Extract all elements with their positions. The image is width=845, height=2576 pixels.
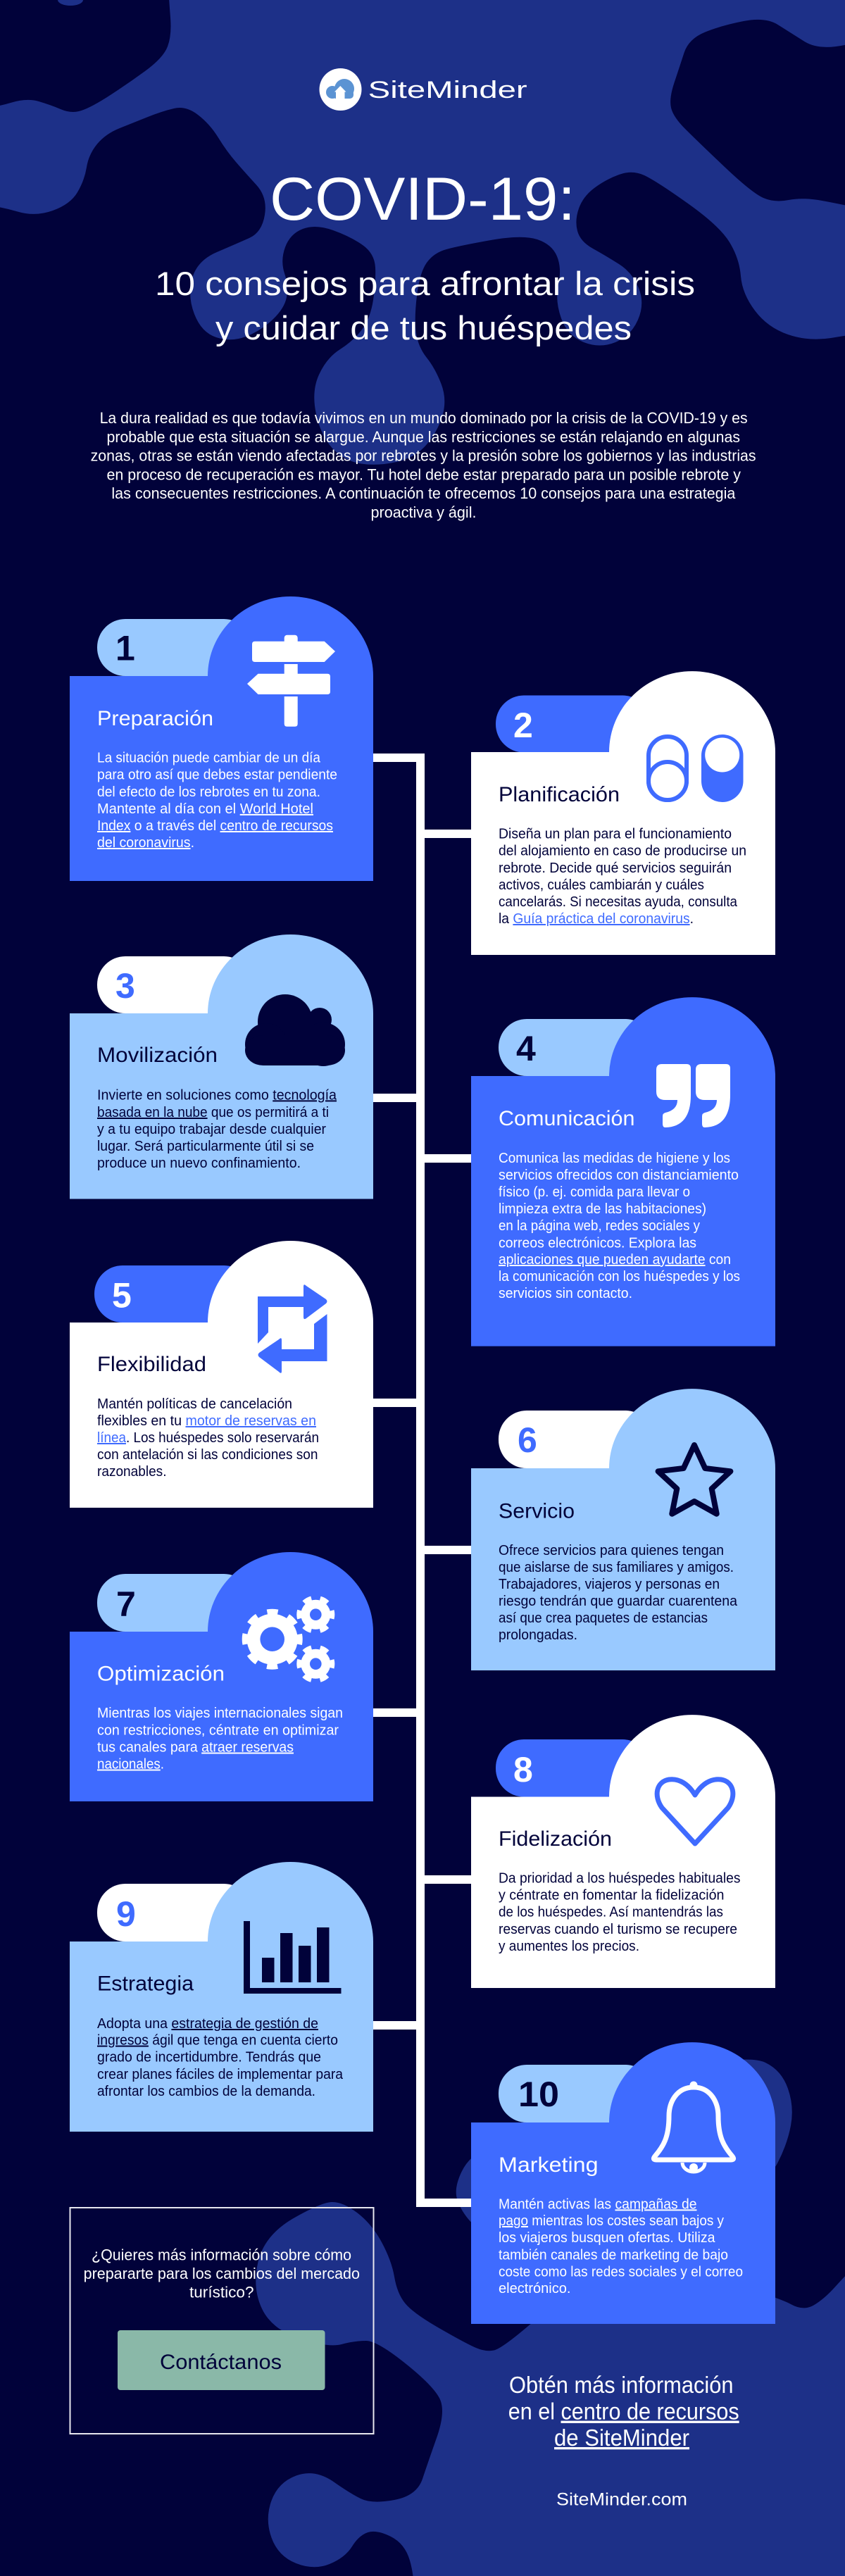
number 8: 8 <box>513 1750 533 1789</box>
body text: Index o a través del centro de recursos <box>97 818 333 834</box>
body text: también canales de marketing de bajo <box>499 2247 728 2263</box>
body text: produce un nuevo confinamiento. <box>97 1156 301 1171</box>
body text: Mantén políticas de cancelación <box>97 1396 292 1412</box>
connector timeline <box>373 754 471 2207</box>
body text: Invierte en soluciones como tecnología <box>97 1087 337 1103</box>
heading: Movilización <box>97 1044 218 1067</box>
intro text: La dura realidad es que todavía vivimos en un mundo dominado por la crisis de la COVID-19 y es <box>100 409 748 427</box>
number 6: 6 <box>518 1420 537 1460</box>
body text: coste como las redes sociales y el correo <box>499 2265 743 2280</box>
logo: SiteMinder <box>320 68 527 111</box>
body text: Mientras los viajes internacionales sigan <box>97 1706 343 1721</box>
subtitle: 10 consejos para afrontar la crisis <box>155 265 695 302</box>
body text: con antelación si las condiciones son <box>97 1447 318 1463</box>
body text: Mantén activas las campañas de <box>499 2196 697 2212</box>
body text <box>499 2196 743 2296</box>
heading: Fidelización <box>499 1827 612 1851</box>
footer text: resources: Obtén más información <box>509 2372 734 2398</box>
body text: prolongadas. <box>499 1627 577 1643</box>
body text: del coronavirus. <box>97 835 194 851</box>
call to action text: prepararte para los cambios del mercado <box>84 2265 360 2282</box>
heading: Servicio <box>499 1500 575 1523</box>
intro text: las consecuentes restricciones. A continuación te ofrecemos 10 consejos para una estrategia <box>111 484 736 502</box>
number 10: 10 <box>518 2075 559 2114</box>
body text: aplicaciones que pueden ayudarte con <box>499 1252 731 1268</box>
call to action text: turístico? <box>189 2284 254 2301</box>
number 9: 9 <box>116 1894 136 1934</box>
icon: gears <box>245 1598 332 1680</box>
body text: rebrote. Decide qué servicios seguirán <box>499 861 732 876</box>
number 3: 3 <box>115 966 135 1006</box>
icon: cloud <box>245 994 345 1066</box>
body text: grado de incertidumbre. Tendrás que <box>97 2049 321 2065</box>
panel: 1 Preparación <box>70 596 373 881</box>
number 5: 5 <box>112 1276 132 1315</box>
heading: Preparación <box>97 707 213 730</box>
body text: reservas cuando el turismo se recupere <box>499 1922 737 1937</box>
icon: signpost <box>247 635 335 727</box>
footer: website: SiteMinder.com <box>556 2490 687 2510</box>
intro text: zonas, otras se están viendo afectadas por rebrotes y la presión sobre los gobiernos y las industrias <box>91 447 756 465</box>
button: contact: Contáctanos <box>160 2351 282 2374</box>
icon: repeat arrows <box>258 1284 327 1373</box>
body text: Mantente al día con el World Hotel <box>97 801 313 817</box>
body text: activos, cuáles cambiarán y cuáles <box>499 877 704 893</box>
body text <box>499 1151 740 1301</box>
body text: riesgo tendrán que guardar cuarentena <box>499 1594 738 1609</box>
panel: 4 Comunicación <box>471 997 775 1346</box>
panel: 3 Movilización <box>70 934 373 1199</box>
heading: Flexibilidad <box>97 1353 206 1376</box>
body text <box>97 1396 319 1480</box>
body text: lugar. Será particularmente útil si se <box>97 1139 314 1154</box>
body text: línea. Los huéspedes solo reservarán <box>97 1430 319 1446</box>
body text <box>97 751 337 851</box>
panel: 5 Flexibilidad <box>70 1241 373 1508</box>
background blob: bottom <box>256 2060 845 2576</box>
logo: SiteMinder: SiteMinder <box>368 77 527 104</box>
body text: del alojamiento en caso de producirse un <box>499 844 746 859</box>
body text: que aislarse de sus familiares y amigos. <box>499 1560 734 1575</box>
icon: star <box>658 1445 730 1514</box>
body text: y céntrate en fomentar la fidelización <box>499 1887 724 1903</box>
panel: 6 Servicio <box>471 1389 775 1670</box>
body text: La situación puede cambiar de un día <box>97 751 321 766</box>
footer text: resources: de SiteMinder <box>554 2425 689 2451</box>
footer text: resources <box>508 2372 739 2451</box>
intro text: proactiva y ágil. <box>370 504 476 521</box>
body text <box>97 1087 337 1171</box>
body text: así que crea paquetes de estancias <box>499 1611 708 1626</box>
body text: flexibles en tu motor de reservas en <box>97 1413 316 1429</box>
icon: heart <box>657 1780 733 1844</box>
body text: Da prioridad a los huéspedes habituales <box>499 1870 741 1886</box>
heading: Marketing <box>499 2153 599 2177</box>
body text: pago mientras los costes sean bajos y <box>499 2213 724 2229</box>
body text: en la página web, redes sociales y <box>499 1218 700 1234</box>
icon: bar chart <box>244 1921 341 1994</box>
heading: Planificación <box>499 783 620 806</box>
body text: y aumentes los precios. <box>499 1939 639 1954</box>
body text: los viajeros busquen ofertas. Utiliza <box>499 2230 715 2246</box>
body text: servicios sin contacto. <box>499 1286 632 1301</box>
panel: 9 Estrategia <box>70 1862 373 2132</box>
body text: Diseña un plan para el funcionamiento <box>499 827 732 842</box>
body text: servicios ofrecidos con distanciamiento <box>499 1168 739 1183</box>
panel: 2 Planificación <box>471 671 775 955</box>
intro text <box>91 409 756 521</box>
body text: electrónico. <box>499 2281 570 2296</box>
body text: basada en la nube que os permitirá a ti <box>97 1105 329 1120</box>
footer text: resources: en el centro de recursos <box>508 2399 739 2425</box>
body text <box>97 2016 344 2099</box>
body text: afrontar los cambios de la demanda. <box>97 2084 315 2099</box>
number 7: 7 <box>116 1584 136 1624</box>
body text: nacionales. <box>97 1756 164 1772</box>
body text: la comunicación con los huéspedes y los <box>499 1269 740 1284</box>
panel: 8 Fidelización <box>471 1715 775 1988</box>
background blob: top <box>0 0 845 465</box>
body text: con restricciones, céntrate en optimizar <box>97 1722 339 1738</box>
number 1: 1 <box>115 628 135 668</box>
icon: bell <box>653 2082 734 2172</box>
body text <box>97 1706 343 1772</box>
body text: físico (p. ej. comida para llevar o <box>499 1184 690 1200</box>
body text <box>499 1543 738 1643</box>
body text <box>499 1870 741 1954</box>
call to action box <box>70 2208 373 2434</box>
button: contact <box>118 2330 325 2390</box>
icon: quotes <box>656 1064 730 1127</box>
heading: Comunicación <box>499 1107 635 1130</box>
body text: y a tu equipo trabajar desde cualquier <box>97 1122 326 1137</box>
body text: razonables. <box>97 1464 166 1480</box>
heading: Estrategia <box>97 1972 194 1996</box>
subtitle <box>155 265 695 346</box>
body text: cancelarás. Si necesitas ayuda, consulta <box>499 894 738 910</box>
body text: tus canales para atraer reservas <box>97 1739 294 1755</box>
title: COVID-19: <box>270 165 575 233</box>
body text: Ofrece servicios para quienes tengan <box>499 1543 724 1558</box>
body text: Trabajadores, viajeros y personas en <box>499 1577 720 1592</box>
body text: Comunica las medidas de higiene y los <box>499 1151 730 1166</box>
number 2: 2 <box>513 706 533 745</box>
body text <box>499 827 746 927</box>
body text: crear planes fáciles de implementar para <box>97 2067 344 2082</box>
call to action text <box>84 2246 360 2301</box>
call to action text: ¿Quieres más información sobre cómo <box>92 2246 351 2263</box>
body text: limpieza extra de las habitaciones) <box>499 1201 706 1217</box>
panel: 10 Marketing <box>471 2042 775 2324</box>
body text: ingresos ágil que tenga en cuenta cierto <box>97 2033 338 2049</box>
body text: del efecto de los rebrotes en tu zona. <box>97 784 320 800</box>
body text: la Guía práctica del coronavirus. <box>499 911 694 927</box>
body text: de los huéspedes. Así mantendrás las <box>499 1904 723 1920</box>
body text: Adopta una estrategia de gestión de <box>97 2016 318 2032</box>
panel: 7 Optimización <box>70 1552 373 1801</box>
body text: para otro así que debes estar pendiente <box>97 768 337 783</box>
number 4: 4 <box>516 1029 536 1068</box>
intro text: en proceso de recuperación es mayor. Tu hotel debe estar preparado para un posible rebrote y <box>107 466 741 484</box>
intro text: probable que esta situación se alargue. Aunque las restricciones se están relajando en algunas <box>107 428 740 446</box>
subtitle: y cuidar de tus huéspedes <box>215 309 632 346</box>
icon: toggles <box>649 734 744 802</box>
heading: Optimización <box>97 1662 225 1686</box>
body text: correos electrónicos. Explora las <box>499 1235 696 1251</box>
